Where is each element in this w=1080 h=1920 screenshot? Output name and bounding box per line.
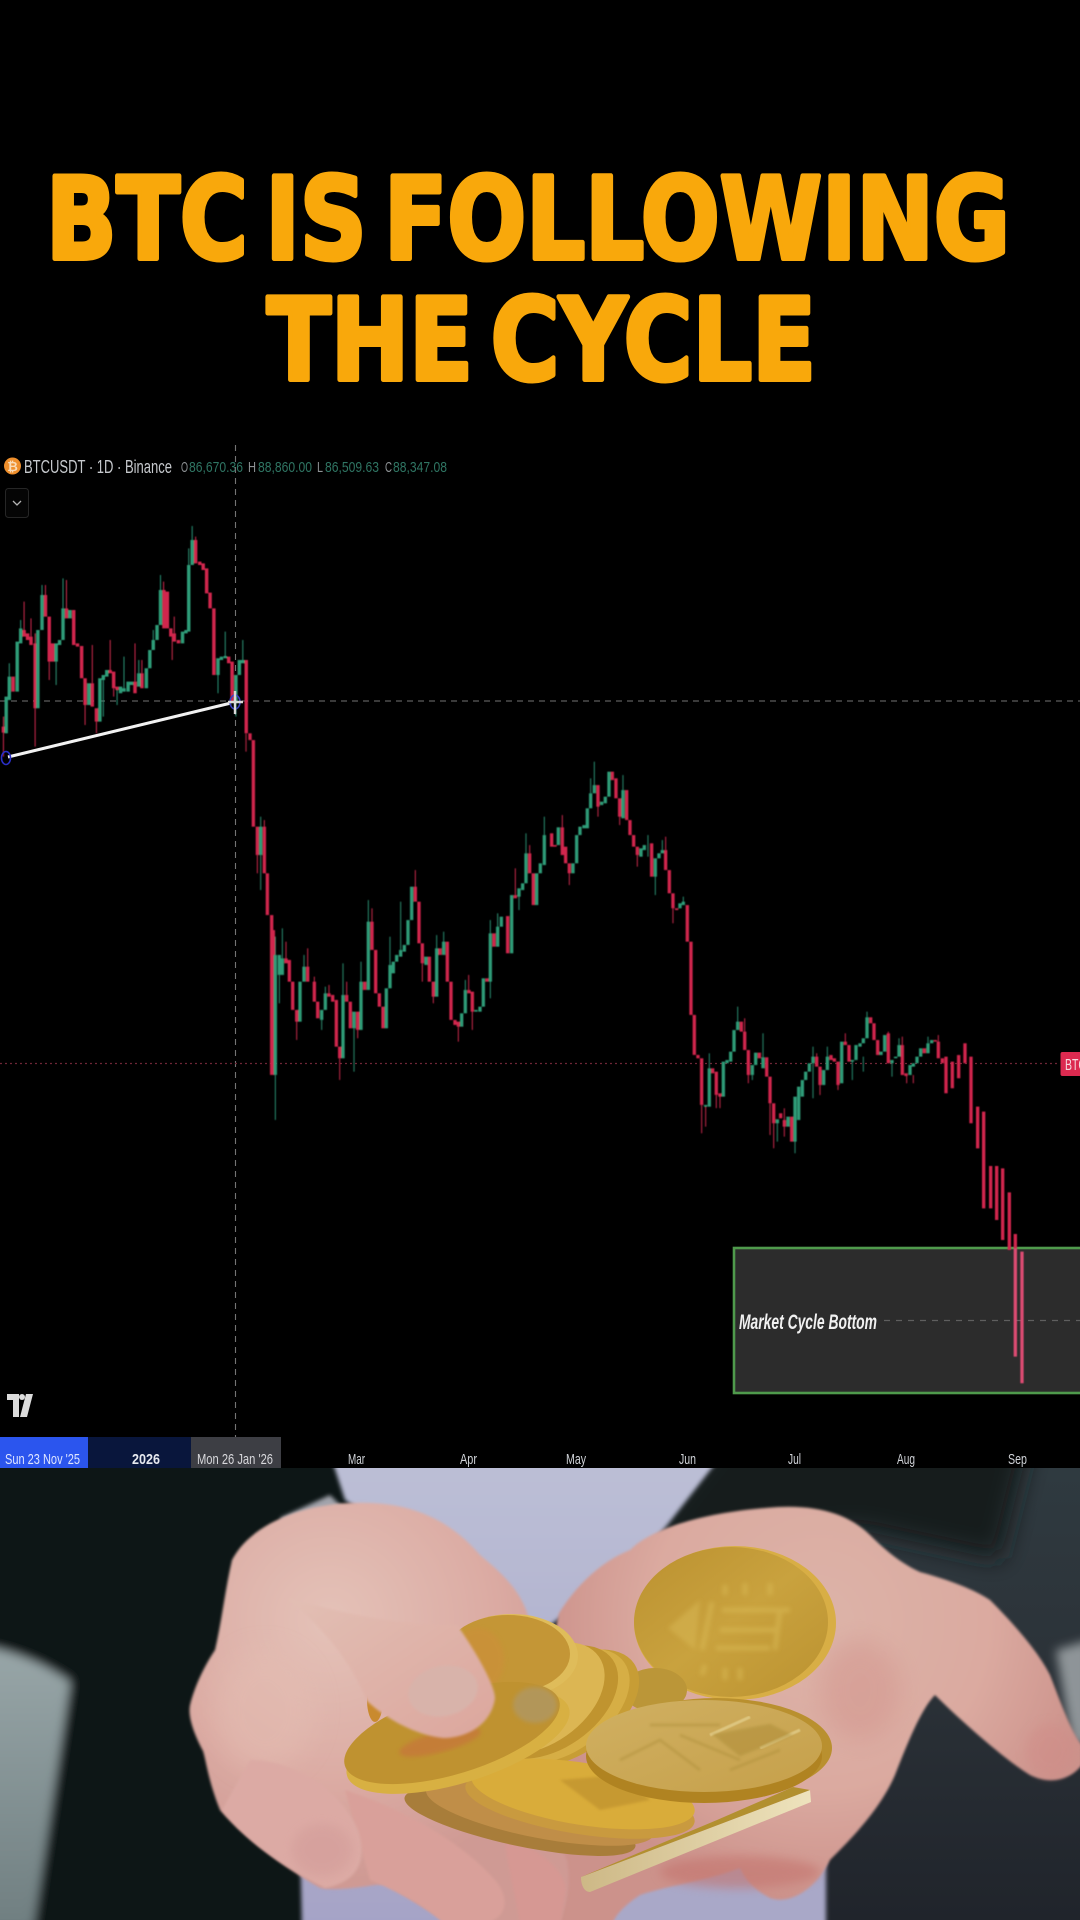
third finger [505, 1835, 566, 1920]
candles: June to August [723, 1007, 971, 1153]
thumb with fingernail [332, 1628, 496, 1740]
axis badge: year [88, 1437, 191, 1468]
axis badge: cursor start date [0, 1437, 88, 1468]
time axis: May [566, 1451, 586, 1468]
axis badge: cursor date: Mon 26 Jan '26 [197, 1451, 273, 1468]
coin: lower stacked coins [404, 1758, 695, 1856]
time axis: Jul [788, 1451, 801, 1468]
time axis: Jun [679, 1451, 696, 1468]
little finger [221, 1800, 361, 1888]
second finger [345, 1790, 505, 1920]
chart header: symbol and OHLC: L [317, 459, 323, 476]
icon: bitcoin coin: ₿ [7, 459, 18, 474]
coin: coin stack behind thumb [367, 1614, 687, 1761]
photo: hands holding gold coins [0, 1440, 1080, 1920]
market cycle bottom zone: Market Cycle Bottom [739, 1311, 877, 1334]
chart header: symbol and OHLC: 88,347.08 [393, 459, 447, 476]
current price dotted line [0, 1062, 1060, 1064]
chart header: symbol and OHLC: C [385, 459, 392, 476]
chart header: symbol and OHLC: 86,670.36 [189, 459, 243, 476]
chart header: symbol and OHLC: 86,509.63 [325, 459, 379, 476]
time axis: Apr [460, 1451, 477, 1468]
left hand [190, 1503, 569, 1920]
axis badge: cursor start date: Sun 23 Nov '25 [5, 1451, 80, 1468]
axis badge: cursor date [191, 1437, 281, 1468]
coin: upright bitcoin coin [634, 1546, 836, 1700]
candlestick chart [3, 526, 1022, 1383]
axis badge: year: 2026 [132, 1451, 160, 1468]
icon: bitcoin coin [4, 458, 21, 474]
right hand [520, 1507, 1080, 1920]
market cycle bottom zone [734, 1248, 1080, 1393]
crosshair lines [0, 445, 1080, 1437]
coin: large front coin [586, 1698, 832, 1803]
icon: tradingview logo [7, 1394, 33, 1417]
time axis: Sep [1008, 1451, 1027, 1468]
fingernail [432, 1686, 474, 1714]
trend line drawing [2, 691, 243, 764]
chart header: symbol and OHLC: 88,860.00 [258, 459, 312, 476]
chart header: symbol and OHLC [4, 457, 447, 477]
title [46, 154, 1010, 406]
chart panel [0, 445, 1080, 1468]
chart header: symbol and OHLC: H [248, 459, 256, 476]
photo background: suit and shirt [0, 1440, 1080, 1920]
icon: collapse chevron button [6, 488, 28, 518]
candles: November to January [3, 526, 246, 757]
coin: coin held by thumb [344, 1683, 570, 1794]
candles: final capitulation into the zone [978, 1107, 1022, 1383]
time axis [0, 1437, 1027, 1468]
price label [1060, 1052, 1080, 1076]
title: THE CYCLE [267, 274, 816, 406]
chart header: symbol and OHLC: O [181, 459, 188, 476]
coin: tilted bottom coin [581, 1787, 811, 1892]
candles: January to June [246, 733, 720, 1133]
time axis: Mar [348, 1451, 365, 1468]
chart header: symbol and OHLC: BTCUSDT · 1D · Binance [24, 457, 172, 477]
time axis: Aug [897, 1451, 915, 1468]
